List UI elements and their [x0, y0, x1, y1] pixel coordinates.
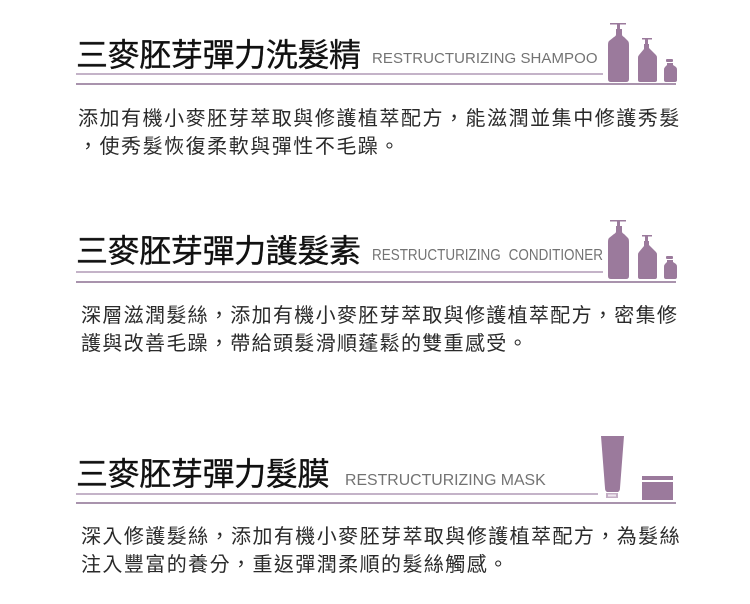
heading: mask: 三麥胚芽彈力髮膜	[76, 456, 329, 492]
subtitle: conditioner: RESTRUCTURIZING CONDITIONER	[372, 247, 603, 264]
body text: shampoo: ，使秀髮恢復柔軟與彈性不毛躁。	[78, 136, 401, 158]
body text: conditioner	[81, 304, 678, 355]
body text: conditioner: 深層滋潤髮絲，添加有機小麥胚芽萃取與修護植萃配方，密集修	[81, 305, 678, 327]
body text: conditioner: 護與改善毛躁，帶給頭髮滑順蓬鬆的雙重感受。	[81, 333, 529, 355]
heading: conditioner: 三麥胚芽彈力護髮素	[76, 233, 361, 269]
icon: tube and jar	[601, 436, 673, 500]
heading: shampoo: 三麥胚芽彈力洗髮精	[76, 37, 361, 73]
panel: conditioner	[76, 220, 678, 355]
body text: mask	[81, 526, 681, 576]
body text: shampoo: 添加有機小麥胚芽萃取與修護植萃配方，能滋潤並集中修護秀髮	[78, 108, 681, 130]
body text: mask: 深入修護髮絲，添加有機小麥胚芽萃取與修護植萃配方，為髮絲	[81, 526, 681, 548]
subtitle: shampoo: RESTRUCTURIZING SHAMPOO	[372, 50, 598, 67]
panel: shampoo	[76, 23, 681, 158]
body text: mask: 注入豐富的養分，重返彈潤柔順的髮絲觸感。	[81, 554, 510, 576]
body text: shampoo	[78, 108, 681, 158]
subtitle: mask: RESTRUCTURIZING MASK	[345, 472, 546, 489]
icon: shampoo bottles	[608, 23, 677, 82]
panel: mask	[76, 436, 681, 576]
icon: conditioner bottles	[608, 220, 677, 279]
